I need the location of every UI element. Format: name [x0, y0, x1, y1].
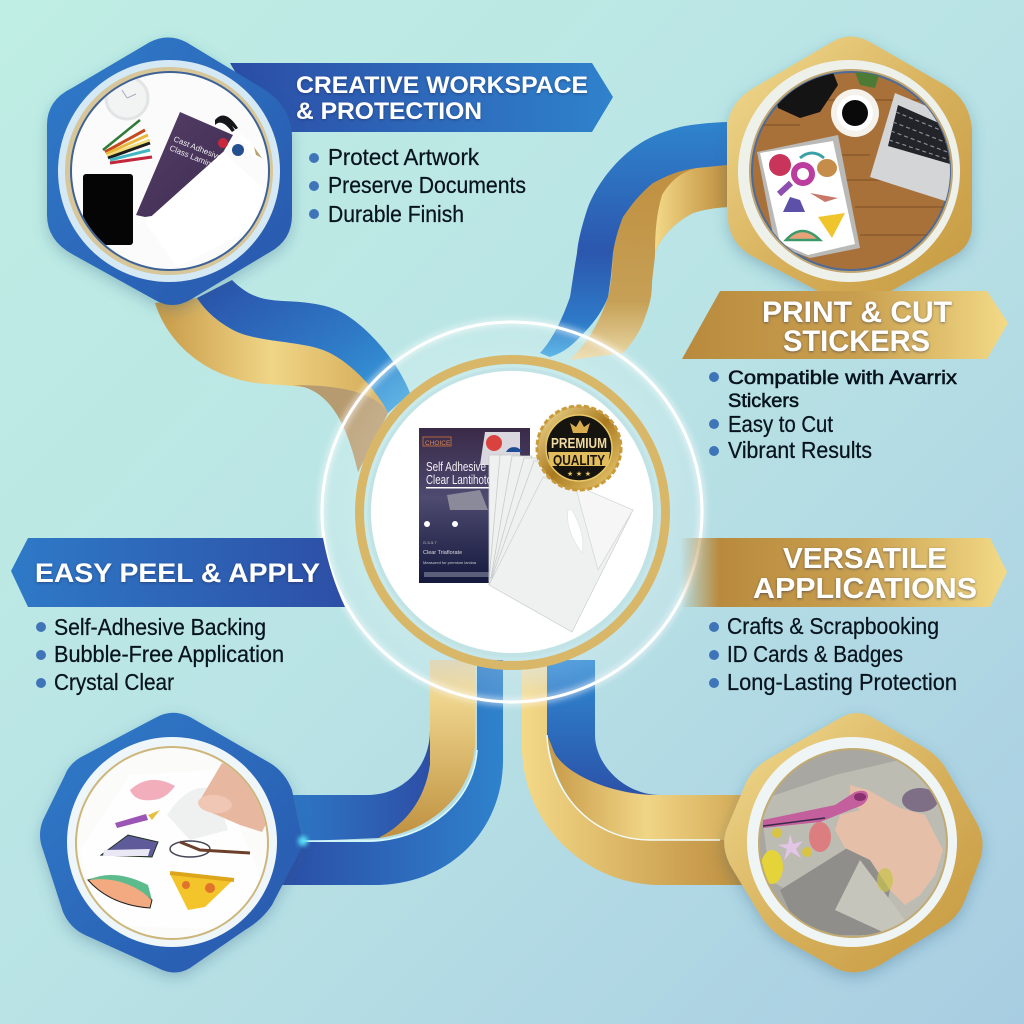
glowing halo ring — [322, 322, 702, 702]
bullet list: creative workspace — [309, 144, 526, 227]
product: laminate pack cover: Clear Triaflorate — [423, 550, 462, 556]
badge: premium quality seal — [537, 406, 621, 490]
bullet list: creative workspace: Protect Artwork — [328, 144, 479, 170]
bullet list: easy peel: Self-Adhesive Backing — [54, 614, 266, 640]
bullet list: print and cut: Compatible with Avarrix — [728, 368, 958, 389]
product: laminate pack cover — [419, 428, 530, 583]
heading: creative workspace — [296, 72, 588, 125]
bullet list: versatile: Crafts & Scrapbooking — [727, 613, 939, 639]
hexagon badge: creative workspace — [47, 38, 292, 305]
banner: print and cut — [682, 291, 1008, 359]
product: laminate pack cover: G-5-5.7 — [423, 540, 437, 545]
heading: versatile: VERSATILE — [783, 543, 947, 575]
bullet list: print and cut: Stickers — [728, 391, 799, 412]
heading: creative workspace: & PROTECTION — [296, 98, 482, 125]
icon: pink star sticker — [778, 834, 803, 860]
heading: print and cut — [762, 296, 952, 358]
badge: premium quality seal: ★★★ — [567, 470, 591, 478]
product: clear sheets fan — [489, 455, 633, 632]
ribbon: bottom-left gold — [378, 660, 475, 838]
ribbon: bottom-right gold lower — [522, 660, 745, 885]
badge: premium quality seal: QUALITY — [553, 452, 605, 469]
banner: easy peel — [11, 538, 345, 607]
badge: premium quality seal: PREMIUM — [551, 435, 607, 452]
ribbon: bottom-right blue — [547, 660, 660, 800]
ribbon: top-right gold — [570, 165, 727, 360]
ribbon: bottom-left blue lower — [280, 660, 503, 885]
photo: stickers on wooden desk — [757, 72, 950, 258]
heading: print and cut: PRINT & CUT — [762, 296, 952, 329]
bullet list: versatile: Long-Lasting Protection — [727, 669, 957, 695]
panel: creative workspace — [47, 38, 613, 305]
bullet list: versatile — [709, 613, 957, 695]
heading: versatile: APPLICATIONS — [753, 573, 977, 605]
banner: creative workspace — [230, 63, 613, 132]
photo: peeling sticker sheet — [80, 763, 268, 930]
heading: print and cut: STICKERS — [783, 325, 930, 358]
ribbon: top-right gold highlight — [655, 165, 727, 253]
heading: easy peel: EASY PEEL & APPLY — [35, 558, 320, 588]
bullet list: print and cut: Easy to Cut — [728, 411, 834, 437]
glow spark — [298, 836, 308, 846]
bullet list: easy peel: Crystal Clear — [54, 669, 174, 695]
photo: desk flat lay — [83, 78, 262, 245]
bullet list: creative workspace: Preserve Documents — [328, 172, 526, 198]
icon: crown — [570, 420, 590, 433]
banner: versatile — [680, 538, 1007, 607]
bullet list: print and cut: Vibrant Results — [728, 437, 872, 463]
photo: hand holding laminated craft — [762, 761, 946, 936]
product: laminate pack cover: Self Adhesive — [426, 459, 486, 474]
ribbons: connectors to center — [155, 122, 745, 885]
heading: creative workspace: CREATIVE WORKSPACE — [296, 72, 588, 99]
bullet list: easy peel: Bubble-Free Application — [54, 641, 284, 667]
ribbon: bottom-left blue upper — [280, 730, 430, 842]
panel: versatile applications — [680, 538, 1007, 972]
product: laminate pack cover: Measured for premium lamina — [423, 560, 477, 565]
bullet list: creative workspace: Durable Finish — [328, 201, 464, 227]
heading: versatile — [753, 543, 977, 605]
ribbon: top-right blue — [540, 122, 727, 357]
ribbon: top-left blue — [197, 280, 410, 413]
ribbon: top-left gold shaded wedge — [293, 385, 388, 472]
panel: easy peel and apply — [11, 538, 345, 972]
ribbon: bottom-right gold pale top — [522, 660, 547, 700]
ribbon: top-left gold — [155, 298, 388, 472]
photo: desk flat lay: Class Laminate — [168, 144, 223, 173]
hexagon badge: print and cut — [727, 36, 972, 306]
bullet list: print and cut — [709, 368, 958, 463]
photo: desk flat lay: Cast Adhesive — [172, 135, 224, 162]
central product circle — [360, 360, 666, 666]
product: laminate pack cover: Clear Lantihoto — [426, 472, 492, 487]
bullet list: easy peel — [36, 614, 284, 695]
ribbon: bottom-right gold upper — [547, 735, 745, 842]
bullet list: versatile: ID Cards & Badges — [727, 641, 903, 667]
hexagon badge: versatile — [724, 713, 983, 972]
glow line left — [300, 750, 477, 841]
product: laminate pack cover: CHOICE — [425, 440, 451, 447]
hexagon badge: easy peel — [40, 713, 302, 972]
panel: print and cut — [682, 36, 1008, 463]
glow line right — [547, 735, 720, 840]
